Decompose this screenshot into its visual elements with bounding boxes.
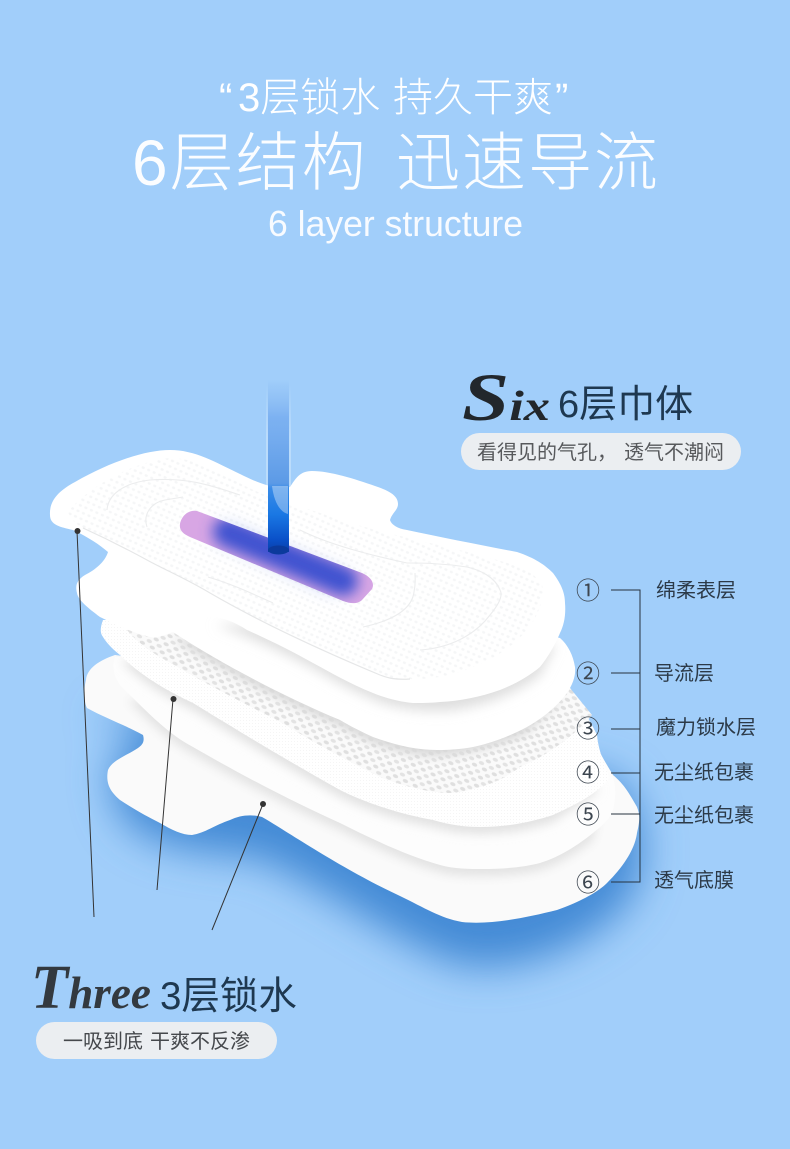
heading: 6层巾体: 6层巾体 bbox=[558, 384, 693, 426]
title block bbox=[132, 76, 660, 244]
layer 4: dust-free paper with fine texture bbox=[101, 620, 609, 827]
drop shadow under pad bbox=[95, 700, 643, 967]
main heading: 6层结构 迅速导流 bbox=[132, 127, 660, 199]
leader 3 bbox=[212, 801, 266, 930]
layer 4 shadow bbox=[120, 660, 600, 834]
script word Three: Three bbox=[31, 954, 151, 1022]
layer 5 shadow bbox=[128, 690, 600, 876]
leader 2 bbox=[157, 696, 176, 890]
pill: absorb to the bottom: 一吸到底 bbox=[63, 1030, 143, 1053]
layer names: 无尘纸包裹 bbox=[654, 804, 754, 827]
pill: absorb to the bottom: 干爽不反渗 bbox=[150, 1030, 250, 1053]
purple absorption strip bbox=[180, 510, 373, 604]
callout: six layers bbox=[461, 359, 741, 470]
main heading: 6层结构 迅速导流: 6层结构 bbox=[132, 127, 368, 199]
circled numbers: ② bbox=[576, 661, 600, 688]
embossed edge line bbox=[83, 528, 410, 679]
heading: 3层锁水: 3层锁水 bbox=[160, 975, 297, 1018]
pill: absorb to the bottom bbox=[36, 1022, 277, 1059]
layer names: 魔力锁水层 bbox=[656, 716, 756, 739]
title line: 3层锁水 持久干爽: ” bbox=[555, 76, 568, 120]
title line: 3层锁水 持久干爽: 持久干爽 bbox=[393, 76, 553, 120]
layer 1: soft top sheet bbox=[50, 450, 565, 703]
circled numbers: ① bbox=[576, 578, 600, 605]
title line: 3层锁水 持久干爽: 3层锁水 bbox=[238, 76, 380, 120]
layer names: 透气底膜 bbox=[654, 869, 734, 892]
circled numbers: ④ bbox=[576, 760, 600, 787]
pill: visible pores: 透气不潮闷 bbox=[624, 441, 724, 464]
layer 2: diversion layer bbox=[173, 600, 575, 750]
main heading: 6层结构 迅速导流: 迅速导流 bbox=[396, 127, 660, 199]
subtitle: 6 layer structure: 6 layer structure bbox=[268, 203, 523, 244]
top sheet dotted texture bbox=[68, 458, 543, 679]
pill: visible pores: ， bbox=[597, 442, 617, 464]
pill: visible pores bbox=[461, 433, 741, 470]
circled numbers bbox=[576, 578, 600, 897]
callout: three layers bbox=[31, 954, 297, 1059]
layer 1 shadow on layer 2 bbox=[215, 620, 555, 711]
layer key bbox=[576, 578, 756, 897]
sanitary pad exploded layers bbox=[50, 380, 643, 967]
script word Six: Six bbox=[462, 359, 550, 435]
layer names: 绵柔表层 bbox=[656, 579, 736, 602]
layer names: 导流层 bbox=[654, 662, 714, 685]
bracket lines bbox=[611, 590, 640, 882]
embossed channel lines bbox=[107, 479, 501, 650]
circled numbers: ⑥ bbox=[576, 870, 600, 897]
title line: 3层锁水 持久干爽: “ bbox=[219, 76, 232, 120]
title line: 3层锁水 持久干爽 bbox=[219, 76, 568, 120]
layer names bbox=[654, 579, 756, 892]
blue liquid stream bbox=[266, 380, 291, 554]
leader 1 bbox=[74, 528, 94, 917]
layer names: 无尘纸包裹 bbox=[654, 761, 754, 784]
layer 2 shadow bbox=[173, 638, 560, 756]
blue absorption glow bbox=[212, 525, 352, 592]
circled numbers: ③ bbox=[576, 716, 600, 743]
leader lines to three lock layers bbox=[74, 528, 266, 930]
pill: visible pores: 看得见的气孔 bbox=[477, 441, 597, 464]
layer 3: absorbent mesh core bbox=[127, 610, 592, 793]
circled numbers: ⑤ bbox=[576, 802, 600, 829]
layer 6: breathable base film bbox=[84, 655, 639, 923]
layer 5: dust-free paper bbox=[113, 657, 615, 869]
